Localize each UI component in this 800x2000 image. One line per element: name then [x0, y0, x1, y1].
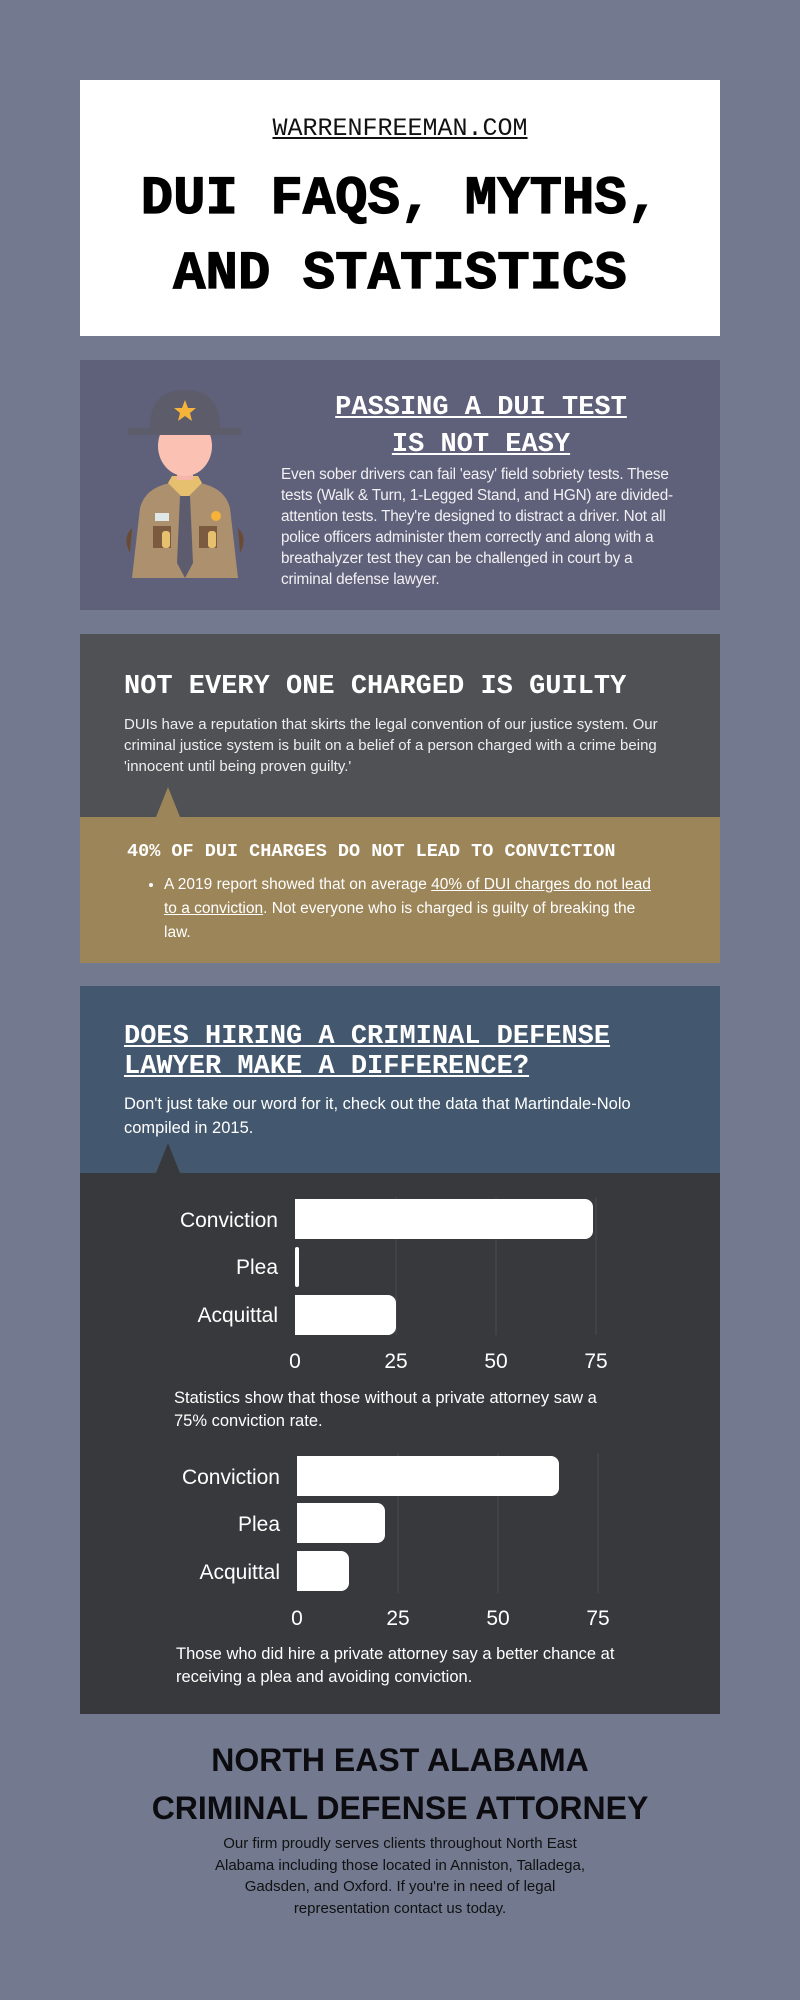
footer heading: NORTH EAST ALABAMA	[211, 1742, 589, 1778]
bar chart: without private attorney: Conviction	[180, 1209, 278, 1232]
heading: LAWYER MAKE A DIFFERENCE?	[124, 1052, 529, 1082]
heading: PASSING A DUI TEST	[335, 393, 627, 423]
main title: AND STATISTICS	[173, 244, 627, 305]
heading: DOES HIRING A CRIMINAL DEFENSE	[124, 1022, 610, 1052]
panel: hiring a lawyer	[80, 986, 720, 1173]
pointer triangle	[156, 787, 180, 817]
panel: 40% statistic	[80, 817, 720, 963]
bar chart: with private attorney: Acquittal	[199, 1561, 280, 1584]
main title	[141, 169, 659, 305]
bar chart: without private attorney: Acquittal	[197, 1304, 278, 1327]
bar chart: without private attorney: 50	[484, 1350, 508, 1373]
heading	[335, 393, 627, 460]
bar chart: without private attorney: 0	[289, 1350, 301, 1373]
panel: charts	[80, 1173, 720, 1714]
panel: not every one charged is guilty	[80, 634, 720, 817]
bar chart: without private attorney	[180, 1197, 608, 1373]
footer heading	[152, 1742, 648, 1826]
bar chart: without private attorney: Plea	[236, 1256, 278, 1279]
bar chart: without private attorney: 75	[584, 1350, 608, 1373]
body text: DUIs have a reputation that skirts the legal convention of our justice system. Our criminal justice system is built on a belief of a person charged with a crime being 'innocent until being proven guilty.'	[124, 716, 658, 775]
bullet text: A 2019 report showed that on average 40% of DUI charges do not lead to a conviction. Not everyone who is charged is guilty of breaking the law.	[164, 876, 651, 941]
icon: police officer	[126, 390, 244, 578]
body text: Don't just take our word for it, check out the data that Martindale-Nolo compiled in 2015.	[124, 1095, 631, 1137]
footer heading: CRIMINAL DEFENSE ATTORNEY	[152, 1790, 648, 1826]
main title: DUI FAQS, MYTHS,	[141, 169, 659, 230]
heading	[124, 1022, 610, 1082]
bar chart: without private attorney: 25	[384, 1350, 408, 1373]
bar chart: with private attorney: Conviction	[182, 1466, 280, 1489]
bar chart: with private attorney: Plea	[238, 1513, 280, 1536]
title panel	[80, 80, 720, 336]
caption 1: Statistics show that those without a private attorney saw a 75% conviction rate.	[174, 1389, 597, 1430]
heading: 40% OF DUI CHARGES DO NOT LEAD TO CONVICTION	[127, 841, 615, 862]
pointer triangle	[156, 1143, 180, 1173]
footer text: Our firm proudly serves clients throughout North East Alabama including those located in Anniston, Talladega, Gadsden, and Oxford. If you're in need of legal representation contact us today.	[215, 1835, 585, 1916]
bar chart: with private attorney	[182, 1453, 610, 1629]
heading: NOT EVERY ONE CHARGED IS GUILTY	[124, 672, 626, 702]
panel: passing a DUI test	[80, 360, 720, 610]
body text: Even sober drivers can fail 'easy' field sobriety tests. These tests (Walk & Turn, 1-Legged Stand, and HGN) are divided-attention tests. They're designed to distract a driver. Not all police officers administer them correctly and along with a breathalyzer test they can be challenged in court by a criminal defense lawyer.	[281, 466, 673, 588]
site url: WARRENFREEMAN.COM	[272, 114, 528, 143]
caption 2: Those who did hire a private attorney say a better chance at receiving a plea and avoiding conviction.	[176, 1645, 614, 1686]
heading: IS NOT EASY	[392, 430, 570, 460]
